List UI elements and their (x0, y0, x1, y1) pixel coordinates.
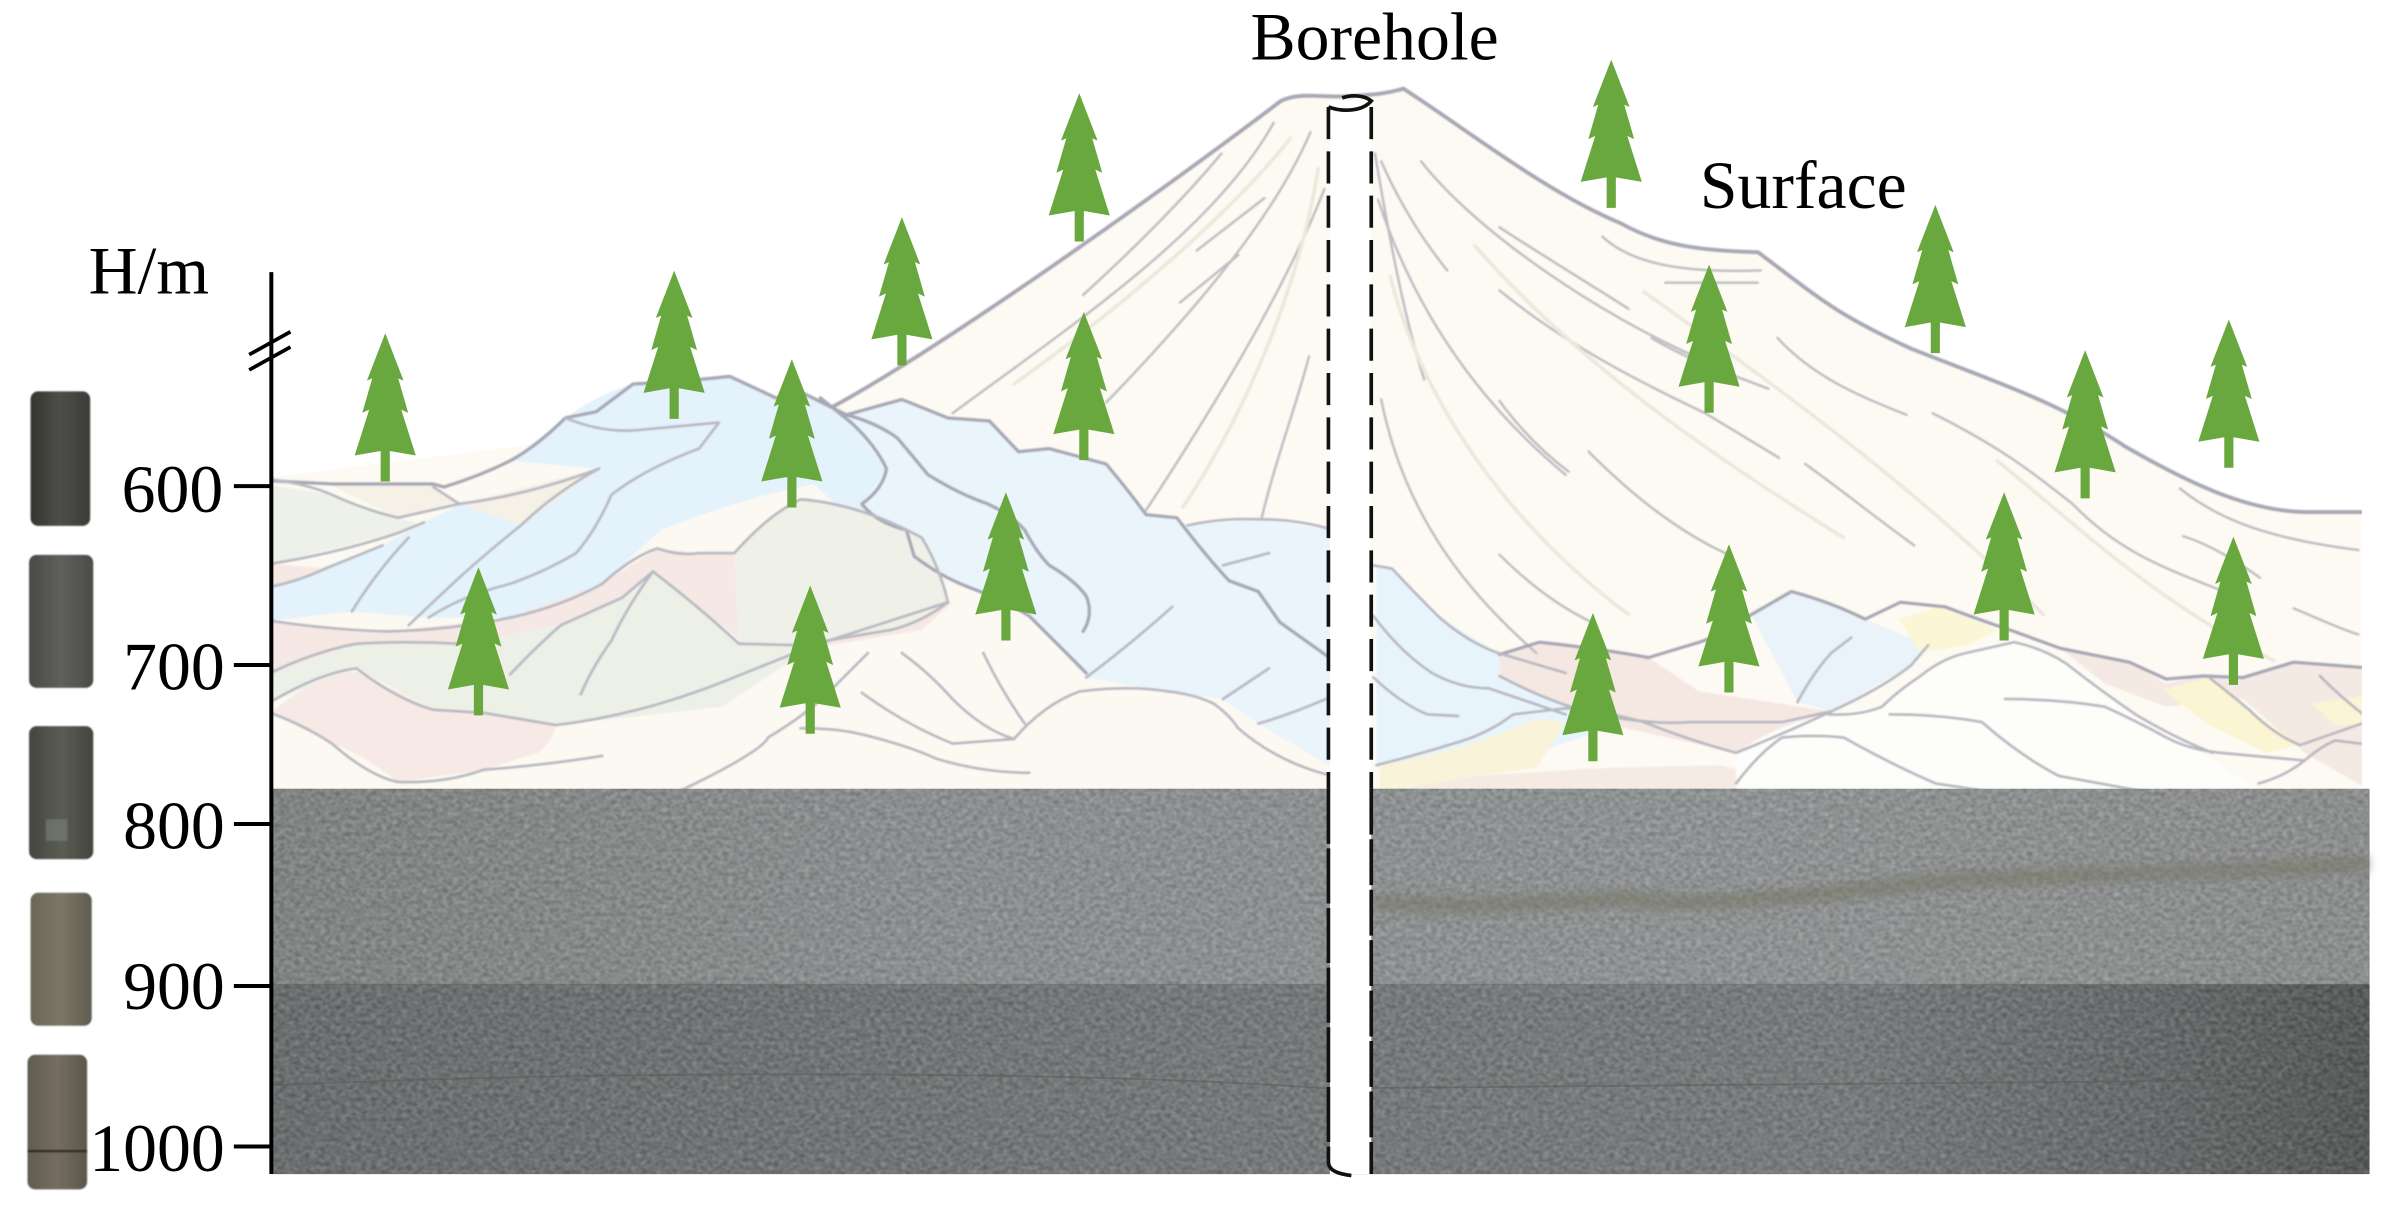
ground: upper rock layer (272, 789, 2369, 984)
region: right beige wedge (1380, 719, 1566, 793)
contour lines: mountain interior (953, 123, 2358, 653)
contour lines: foothill details (270, 418, 2374, 793)
trees (355, 60, 2264, 761)
region: central blue slope (847, 399, 1334, 768)
icon: tree (2055, 350, 2116, 498)
core samples (28, 391, 93, 1189)
borehole dashed walls (1328, 96, 1371, 1176)
icon: tree (780, 585, 841, 734)
region: green middle hill (270, 572, 814, 725)
tick label 700: 700 (123, 629, 225, 704)
landscape illustration (270, 89, 2374, 793)
region: right pink band (2065, 651, 2362, 786)
borehole (1328, 96, 1371, 1176)
main mountain outline (833, 89, 2362, 512)
faint mountain shading strokes (1014, 138, 2274, 661)
region: right yellow patch (2163, 678, 2300, 753)
region: pink strip left (274, 564, 322, 584)
icon: tree (644, 271, 705, 419)
ground: brownish rock streak (1376, 864, 2369, 905)
icon: tree (355, 333, 416, 482)
tick label 900: 900 (123, 949, 225, 1024)
region: upper blue ridge (270, 376, 914, 621)
icon: tree (871, 217, 933, 365)
core sample 1000 m (28, 1055, 87, 1189)
icon: tree (1049, 93, 1110, 242)
axis break mark (249, 332, 290, 370)
icon: tree (448, 567, 509, 715)
tick label 600: 600 (122, 452, 223, 527)
icon: tree (1053, 312, 1114, 460)
core sample 700 m (29, 555, 93, 688)
icon: tree (1562, 613, 1623, 761)
label: Surface: Surface (1700, 148, 1907, 223)
main mountain (272, 89, 2362, 789)
icon: tree (1581, 60, 1642, 208)
region: right blue wedge (1376, 568, 1600, 768)
tick label 1000: 1000 (89, 1111, 225, 1186)
region: blue behind ridge (1183, 520, 1330, 654)
region: beige strip (336, 474, 584, 525)
region: pink band right of centre (1499, 642, 1831, 753)
ground: thin fracture line (272, 1074, 2369, 1088)
region: green left hills (270, 485, 424, 564)
region: right pink low band (1404, 765, 1736, 789)
core sample 600 m (31, 391, 90, 526)
icon: tree (761, 359, 822, 508)
tick label 800: 800 (123, 788, 225, 863)
icon: tree (2203, 537, 2264, 685)
region: far right yellow patch (2312, 694, 2374, 725)
icon: tree (1679, 264, 1740, 413)
icon: tree (1974, 492, 2035, 641)
foothills, fills and contour lines (270, 123, 2374, 793)
icon: tree (1698, 544, 1760, 693)
contour lines: foothill ridges (273, 376, 2374, 679)
core sample 800 m (29, 726, 93, 859)
region: pink lower-left hill (270, 671, 556, 782)
depth axis (234, 272, 290, 1174)
region: pink band (270, 548, 953, 673)
axis title: H/m (89, 234, 209, 309)
left foothills base (273, 376, 1334, 793)
icon: tree (975, 492, 1036, 641)
icon: tree (2198, 320, 2259, 468)
tick marks (234, 486, 272, 1147)
region: green blob (734, 499, 948, 645)
tick labels (89, 452, 225, 1186)
borehole shaft (1330, 101, 1371, 1174)
icon: tree (1905, 205, 1966, 353)
core sample 900 m (31, 893, 92, 1026)
region: pale yellow patch (1899, 607, 1997, 653)
ground: lower rock layer (272, 984, 2369, 1174)
label: Borehole: Borehole (1250, 0, 1499, 75)
region: low blue hill (1751, 591, 1928, 711)
axis line (270, 272, 273, 1174)
region: white hills (1736, 642, 2258, 793)
